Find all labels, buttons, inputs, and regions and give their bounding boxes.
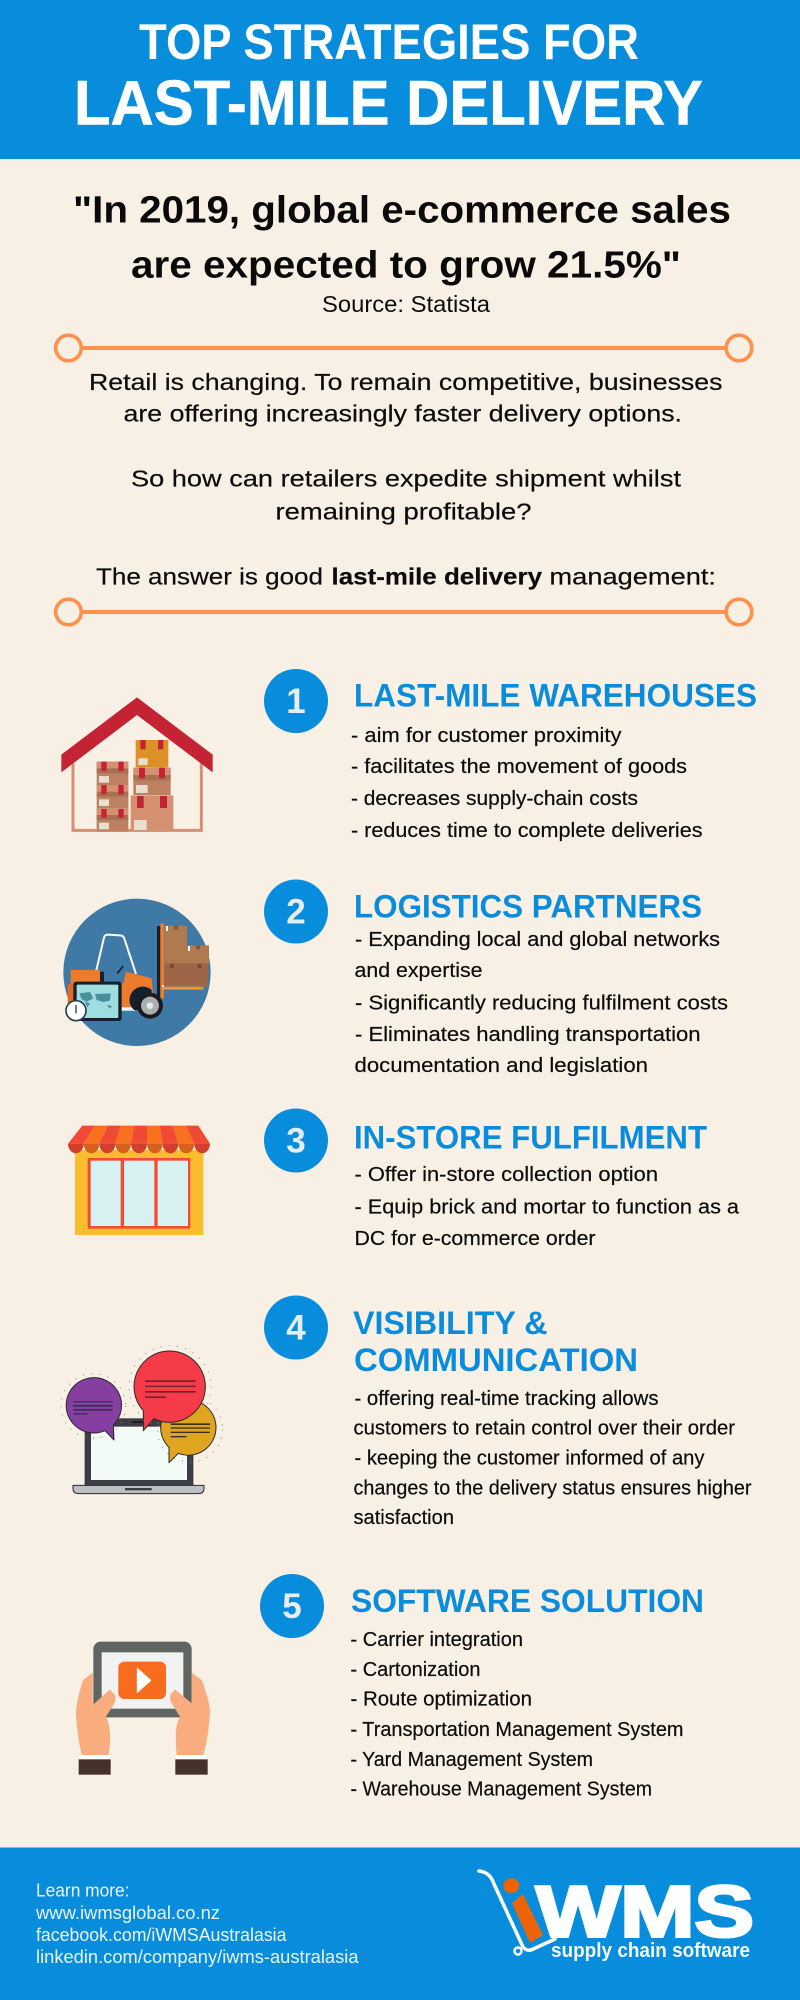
bullets 4: satisfaction <box>354 1507 454 1529</box>
number badge 5: 5 <box>282 1587 302 1626</box>
bullets 4: changes to the delivery status ensures higher <box>354 1477 752 1499</box>
heading 3: IN-STORE FULFILMENT <box>354 1120 707 1156</box>
quote heading <box>73 190 731 286</box>
bullets 2 <box>354 929 728 1077</box>
number badge 3: 3 <box>286 1122 306 1160</box>
bullets 1: - aim for customer proximity <box>351 725 622 747</box>
bullets 4 <box>354 1388 752 1529</box>
bullets 1 <box>351 725 702 842</box>
bullets 3: DC for e-commerce order <box>354 1228 596 1250</box>
bullets 2: documentation and legislation <box>354 1055 648 1077</box>
bullets 5: - Cartonization <box>350 1659 480 1681</box>
bullets 3: - Offer in-store collection option <box>354 1164 658 1186</box>
header banner <box>0 0 800 159</box>
heading 1: LAST-MILE WAREHOUSES <box>354 678 757 714</box>
bullets 2: and expertise <box>354 960 482 982</box>
number badge 4: 4 <box>286 1308 306 1348</box>
heading 4 <box>353 1305 638 1378</box>
bullets 3 <box>354 1164 740 1250</box>
footer banner <box>0 1848 800 2000</box>
footer links: linkedin.com/company/iwms-australasia <box>36 1947 359 1967</box>
intro text: last-mile delivery <box>332 564 542 590</box>
number badge 2: 2 <box>286 892 306 932</box>
bullets 5: - Carrier integration <box>350 1629 523 1651</box>
icon: warehouse with boxes <box>61 697 213 832</box>
bullets 5: - Warehouse Management System <box>350 1779 652 1801</box>
bullets 5: - Transportation Management System <box>350 1719 684 1741</box>
section 5: software solution <box>76 1574 704 1801</box>
bullets 4: customers to retain control over their order <box>354 1418 735 1440</box>
quote heading: are expected to grow 21.5%" <box>131 244 681 286</box>
quote heading: "In 2019, global e-commerce sales <box>73 190 731 232</box>
number badge 4 <box>264 1296 328 1360</box>
intro text: remaining profitable? <box>276 498 532 524</box>
section 1: last-mile warehouses <box>61 669 757 842</box>
footer links <box>35 1880 359 1967</box>
bullets 1: - reduces time to complete deliveries <box>351 820 702 842</box>
bullets 5: - Route optimization <box>350 1689 532 1711</box>
bullets 5 <box>350 1629 684 1801</box>
intro text: So how can retailers expedite shipment whilst <box>131 466 682 492</box>
bullets 4: - offering real-time tracking allows <box>354 1388 658 1410</box>
section 4: visibility and communication <box>61 1296 752 1529</box>
number badge 1 <box>264 669 328 733</box>
heading 2: LOGISTICS PARTNERS <box>354 888 702 924</box>
bullets 2: - Eliminates handling transportation <box>355 1024 700 1046</box>
section 2: logistics partners <box>63 880 728 1077</box>
bullets 2: - Significantly reducing fulfilment costs <box>355 992 728 1014</box>
title line 1: TOP STRATEGIES FOR <box>139 14 639 70</box>
icon: storefront <box>68 1126 210 1235</box>
intro text: are offering increasingly faster delivery options. <box>124 400 682 426</box>
icon: forklift in circle <box>63 899 211 1046</box>
divider bottom <box>56 599 752 625</box>
heading 4: COMMUNICATION <box>354 1342 638 1378</box>
divider top <box>56 335 752 361</box>
intro text: Retail is changing. To remain competitive, businesses <box>89 369 722 395</box>
logo: iWMS supply chain software <box>479 1871 754 1962</box>
footer links: Learn more: <box>36 1880 130 1900</box>
bullets 1: - decreases supply-chain costs <box>351 788 638 810</box>
bullets 3: - Equip brick and mortar to function as a <box>354 1196 740 1218</box>
source line: Source: Statista <box>322 291 490 317</box>
number badge 5 <box>260 1574 324 1638</box>
number badge 2 <box>264 880 328 944</box>
logo: iWMS supply chain software: WMS <box>536 1872 754 1952</box>
title line 2: LAST-MILE DELIVERY <box>74 68 703 138</box>
intro text: The answer is good <box>96 564 323 590</box>
icon: hands holding tablet <box>76 1642 210 1775</box>
bullets 2: - Expanding local and global networks <box>355 929 720 951</box>
footer links: www.iwmsglobal.co.nz <box>35 1903 220 1923</box>
number badge 1: 1 <box>286 682 306 721</box>
intro text <box>89 369 722 590</box>
section 3: in-store fulfilment <box>68 1108 740 1250</box>
bullets 1: - facilitates the movement of goods <box>351 756 687 778</box>
logo: iWMS supply chain software: supply chain software <box>551 1939 750 1962</box>
heading 4: VISIBILITY & <box>353 1305 548 1341</box>
heading 5: SOFTWARE SOLUTION <box>351 1583 704 1619</box>
icon: laptop with speech bubbles <box>61 1346 223 1494</box>
number badge 3 <box>264 1108 328 1172</box>
intro text: management: <box>550 564 716 590</box>
bullets 5: - Yard Management System <box>350 1749 593 1771</box>
bullets 4: - keeping the customer informed of any <box>354 1448 704 1470</box>
footer links: facebook.com/iWMSAustralasia <box>36 1925 287 1945</box>
